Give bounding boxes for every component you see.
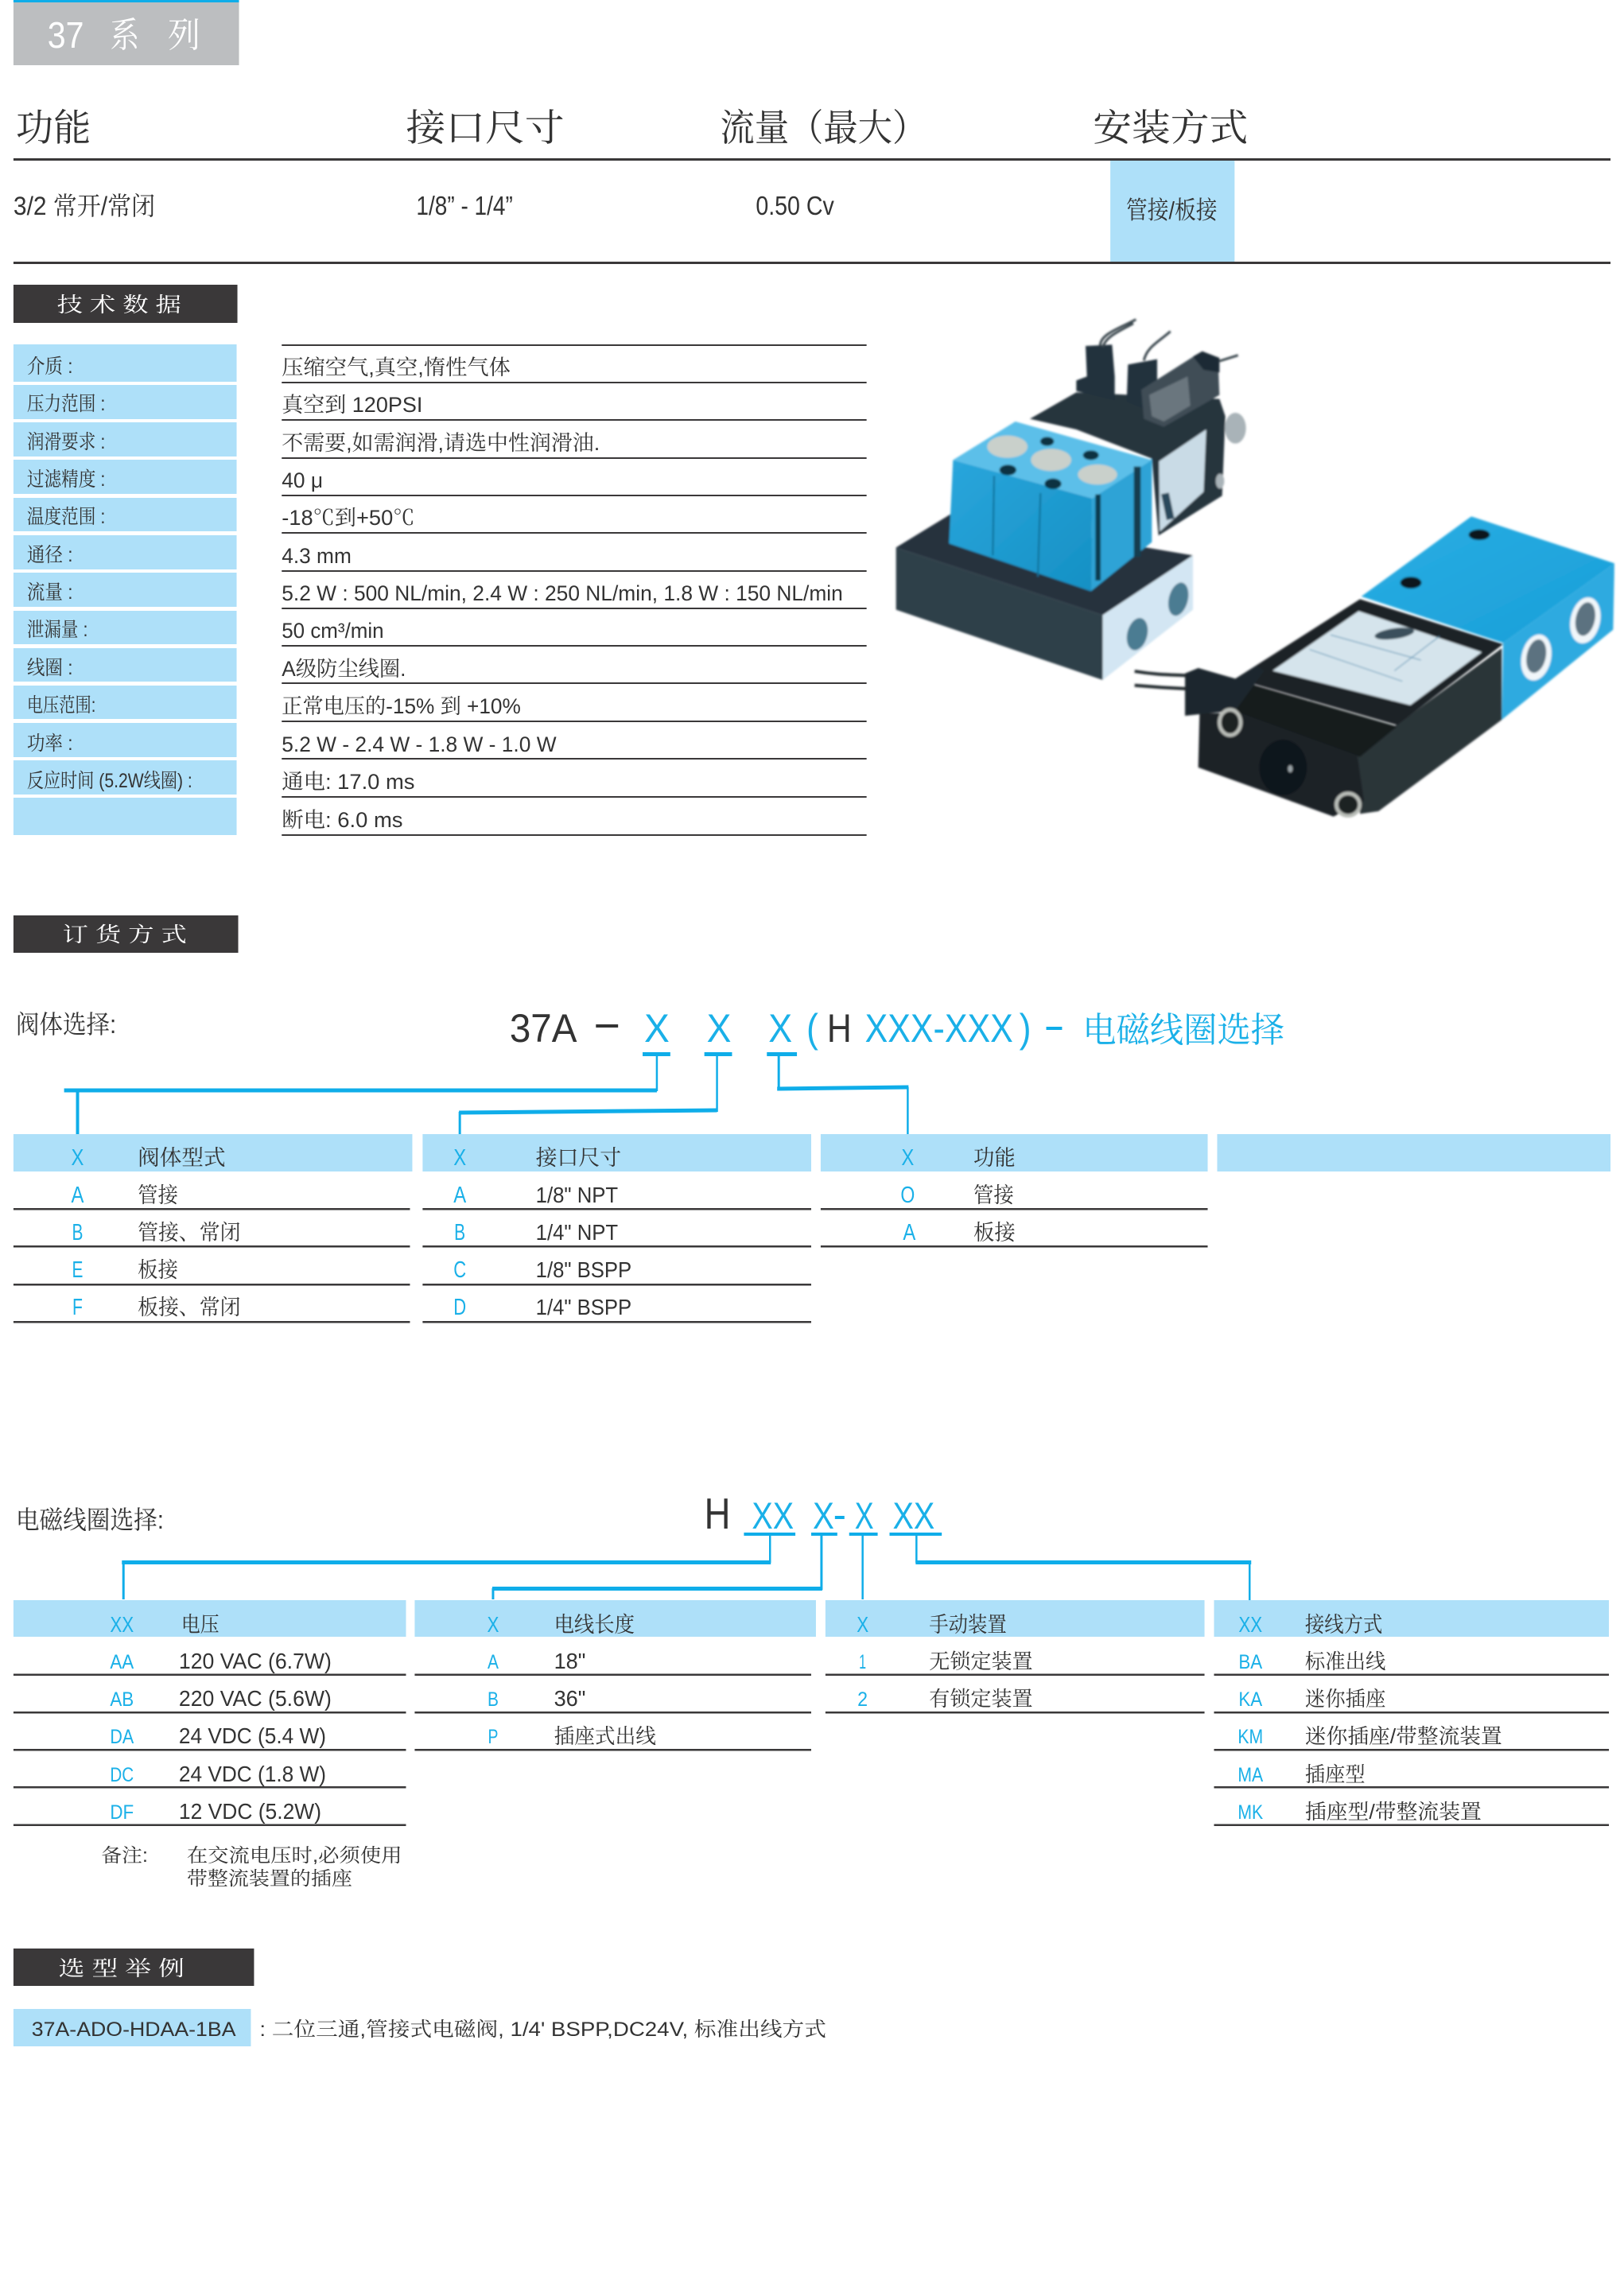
coil code formula: XX xyxy=(752,1495,794,1537)
row: voltage range xyxy=(14,686,867,722)
table: voltage xyxy=(14,1600,406,1826)
table: valve body type: B xyxy=(72,1220,83,1245)
series title badge: 系 xyxy=(110,16,139,55)
coil code formula: X xyxy=(855,1495,874,1537)
table: manual override: 手动装置 xyxy=(929,1613,1007,1637)
row: power: 5.2 W - 2.4 W - 1.8 W - 1.0 W xyxy=(282,732,557,756)
row: medium: 介质 : xyxy=(27,356,73,378)
table: voltage: XX xyxy=(110,1612,134,1637)
row: medium: 压缩空气,真空,惰性气体 xyxy=(282,356,511,379)
row: response time de-energize xyxy=(14,798,867,836)
order code formula: X xyxy=(768,1006,792,1051)
table: voltage: DA xyxy=(110,1726,134,1748)
table: valve body type: E xyxy=(72,1257,83,1283)
table: voltage: 24 VDC (5.4 W) xyxy=(179,1723,326,1748)
heading: max flow: 流量（最大） xyxy=(721,107,927,149)
order code formula: ) xyxy=(1020,1006,1032,1051)
row: temperature range xyxy=(14,498,867,534)
row: coil: A级防尘线圈. xyxy=(282,657,406,681)
heading: function: 功能 xyxy=(16,107,91,149)
row: bore xyxy=(14,535,867,572)
order code formula: H xyxy=(827,1006,852,1051)
order code formula: 电磁线圈选择 xyxy=(1082,1011,1284,1050)
table: port size: A xyxy=(453,1183,467,1208)
table: wiring method: KM xyxy=(1237,1726,1263,1748)
table: wiring method: MK xyxy=(1237,1801,1263,1824)
row: lubrication: 润滑要求 : xyxy=(27,431,105,453)
table: voltage: AB xyxy=(110,1688,134,1711)
table: wire length xyxy=(414,1600,816,1751)
left valve blue block xyxy=(949,422,1152,591)
table: wiring method: 标准出线 xyxy=(1305,1650,1385,1673)
order code formula: XXX-XXX xyxy=(865,1006,1013,1051)
section header: selection example: 选 型 举 例 xyxy=(59,1957,185,1980)
row: lubrication: 不需要,如需润滑,请选中性润滑油. xyxy=(282,431,600,455)
table: function: 功能 xyxy=(973,1146,1016,1170)
row: leakage: 泄漏量 : xyxy=(27,619,87,641)
connector lines: coil code to tables xyxy=(122,1533,1251,1604)
table: wiring method xyxy=(1214,1600,1609,1826)
table: valve body type: 板接、常闭 xyxy=(138,1296,241,1319)
row: coil: 线圈 : xyxy=(27,657,73,679)
table: manual override xyxy=(826,1600,1205,1713)
table: wiring method: MA xyxy=(1237,1764,1263,1786)
table: port size: 1/4" BSPP xyxy=(536,1295,631,1319)
table: port size: 1/4" NPT xyxy=(536,1220,618,1245)
row: response time de-energize: 断电: 6.0 ms xyxy=(282,808,403,832)
right valve black solenoid xyxy=(1135,599,1503,817)
coil code formula xyxy=(705,1489,934,1538)
coil code formula: X xyxy=(813,1495,834,1537)
series title badge xyxy=(14,0,239,65)
product photo: two solenoid valves xyxy=(896,320,1614,817)
left valve xyxy=(896,320,1246,680)
row: flow: 5.2 W : 500 NL/min, 2.4 W : 250 NL/min, 1.8 W : 150 NL/min xyxy=(282,581,843,605)
left valve manifold base xyxy=(896,515,1193,680)
section header: selection example xyxy=(14,1949,254,1986)
table: port size: C xyxy=(453,1257,466,1283)
table: manual override: 1 xyxy=(859,1651,866,1673)
example part number xyxy=(14,2009,251,2046)
row: power xyxy=(14,723,867,760)
label: coil selection: 电磁线圈选择: xyxy=(16,1506,164,1534)
row: response time energize xyxy=(14,760,867,798)
table: valve body type: 阀体型式 xyxy=(138,1146,226,1170)
value: mounting: 管接/板接 xyxy=(1126,196,1218,224)
table: function: O xyxy=(900,1183,915,1208)
order code formula: 37A xyxy=(510,1006,577,1051)
table: wiring method: XX xyxy=(1238,1612,1262,1637)
table: wire length: A xyxy=(488,1651,499,1673)
note: 带整流装置的插座 xyxy=(187,1868,352,1890)
mounting highlight cell xyxy=(1110,161,1234,262)
row: pressure range: 压力范围 : xyxy=(27,393,105,415)
table: valve body type: A xyxy=(72,1183,84,1208)
table: port size: 1/8" NPT xyxy=(536,1183,618,1207)
table: port size: 接口尺寸 xyxy=(536,1146,621,1170)
example description: : 二位三通,管接式电磁阀, 1/4' BSPP,DC24V, 标准出线方式 xyxy=(259,2019,826,2041)
table: port size: 1/8" BSPP xyxy=(536,1257,631,1282)
table: function xyxy=(821,1134,1208,1247)
row: leakage: 50 cm³/min xyxy=(282,619,384,643)
table: valve body type: 管接 xyxy=(138,1183,178,1207)
order code formula: X xyxy=(707,1006,731,1051)
table: port size xyxy=(422,1134,811,1323)
table: wiring method: 迷你插座 xyxy=(1305,1688,1385,1711)
row: bore: 通径 : xyxy=(27,544,73,566)
table: wire length: X xyxy=(487,1612,499,1637)
table: function: 管接 xyxy=(973,1183,1014,1207)
table: valve body type: 板接 xyxy=(138,1258,178,1282)
table: wire length: 插座式出线 xyxy=(554,1725,656,1748)
table: manual override: 有锁定装置 xyxy=(929,1688,1033,1711)
table: function: A xyxy=(903,1220,916,1245)
row: voltage range: 电压范围: xyxy=(27,694,95,717)
table: voltage: 12 VDC (5.2W) xyxy=(179,1799,321,1824)
row: lubrication xyxy=(14,422,867,459)
row: response time energize: 反应时间 (5.2W线圈) : xyxy=(27,770,192,792)
heading: mounting: 安装方式 xyxy=(1093,107,1248,149)
row: bore: 4.3 mm xyxy=(282,544,352,568)
table: wiring method: 插座型/带整流装置 xyxy=(1305,1801,1482,1824)
table: voltage: DC xyxy=(110,1764,134,1786)
coil code formula: H xyxy=(705,1489,730,1538)
order code formula: ( xyxy=(806,1006,818,1051)
left valve solenoid xyxy=(1030,392,1246,535)
table: voltage: AA xyxy=(110,1651,134,1673)
technical data table xyxy=(14,344,867,836)
section header: technical data xyxy=(14,285,238,323)
table: wiring method: 插座型 xyxy=(1305,1763,1366,1786)
table: wire length: P xyxy=(488,1726,498,1748)
table: port size: B xyxy=(454,1220,465,1245)
row: coil xyxy=(14,648,867,684)
row: voltage range: 正常电压的-15% 到 +10% xyxy=(282,694,521,718)
table: wire length: 电线长度 xyxy=(554,1613,635,1637)
table: wire length: 36" xyxy=(554,1686,585,1711)
row: temperature range: 温度范围 : xyxy=(27,506,105,528)
table: port size: D xyxy=(453,1295,466,1320)
series title badge: 37 xyxy=(48,14,84,56)
row: temperature range: -18℃到+50℃ xyxy=(282,506,414,530)
table: wire length: 18" xyxy=(554,1649,585,1673)
note xyxy=(101,1845,402,1890)
table: voltage: 220 VAC (5.6W) xyxy=(179,1686,332,1711)
table: voltage: 120 VAC (6.7W) xyxy=(179,1649,332,1673)
heading: port size: 接口尺寸 xyxy=(406,107,565,149)
section header: ordering: 订 货 方 式 xyxy=(63,923,187,946)
row: filtration: 40 μ xyxy=(282,468,323,492)
section header: ordering xyxy=(14,915,239,953)
order code formula: X xyxy=(644,1006,670,1051)
example part number: 37A-ADO-HDAA-1BA xyxy=(32,2019,236,2041)
table: manual override: 2 xyxy=(857,1688,868,1711)
table: valve body type: X xyxy=(72,1145,84,1171)
row: filtration: 过滤精度 : xyxy=(27,468,105,491)
row: response time energize: 通电: 17.0 ms xyxy=(282,770,414,794)
row: power: 功率 : xyxy=(27,732,73,755)
table: function: 板接 xyxy=(973,1221,1016,1245)
connector lines: valve body code to tables xyxy=(64,1052,908,1136)
label: valve body selection: 阀体选择: xyxy=(16,1010,116,1039)
value: function: 3/2 常开/常闭 xyxy=(14,192,155,220)
table: voltage: 24 VDC (1.8 W) xyxy=(179,1762,326,1786)
note: 备注: xyxy=(101,1845,148,1867)
value: port size: 1/8” - 1/4” xyxy=(416,191,513,220)
table: wiring method: BA xyxy=(1238,1651,1263,1673)
row: pressure range xyxy=(14,385,867,421)
table: voltage: 电压 xyxy=(181,1613,220,1637)
row: filtration xyxy=(14,460,867,496)
summary table xyxy=(14,107,1610,264)
value: flow: 0.50 Cv xyxy=(756,191,834,220)
empty table header xyxy=(1217,1134,1610,1171)
table: wiring method: 迷你插座/带整流装置 xyxy=(1305,1725,1502,1748)
right valve blue body xyxy=(1362,516,1614,720)
left valve connectors and wires xyxy=(1076,320,1238,427)
table: manual override: X xyxy=(857,1612,868,1637)
table: valve body type: F xyxy=(72,1295,83,1320)
row: flow: 流量 : xyxy=(27,581,73,604)
table: wiring method: 接线方式 xyxy=(1305,1613,1382,1637)
table: function: X xyxy=(901,1145,914,1171)
row: leakage xyxy=(14,611,867,647)
series title badge: 列 xyxy=(168,16,200,55)
order code formula xyxy=(510,1006,1284,1051)
table: valve body type xyxy=(14,1134,412,1323)
table: wiring method: KA xyxy=(1238,1688,1263,1711)
table: valve body type: 管接、常闭 xyxy=(138,1221,241,1245)
row: pressure range: 真空到 120PSI xyxy=(282,393,422,417)
table: port size: X xyxy=(453,1145,466,1171)
section header: technical data: 技 术 数 据 xyxy=(57,293,181,317)
note: 在交流电压时,必须使用 xyxy=(187,1845,402,1867)
coil code formula: XX xyxy=(892,1495,934,1537)
table: wire length: B xyxy=(488,1688,499,1711)
row: flow xyxy=(14,573,867,609)
right valve xyxy=(1135,516,1614,817)
row: medium xyxy=(14,344,867,383)
table: manual override: 无锁定装置 xyxy=(929,1650,1033,1673)
table: voltage: DF xyxy=(110,1801,134,1824)
